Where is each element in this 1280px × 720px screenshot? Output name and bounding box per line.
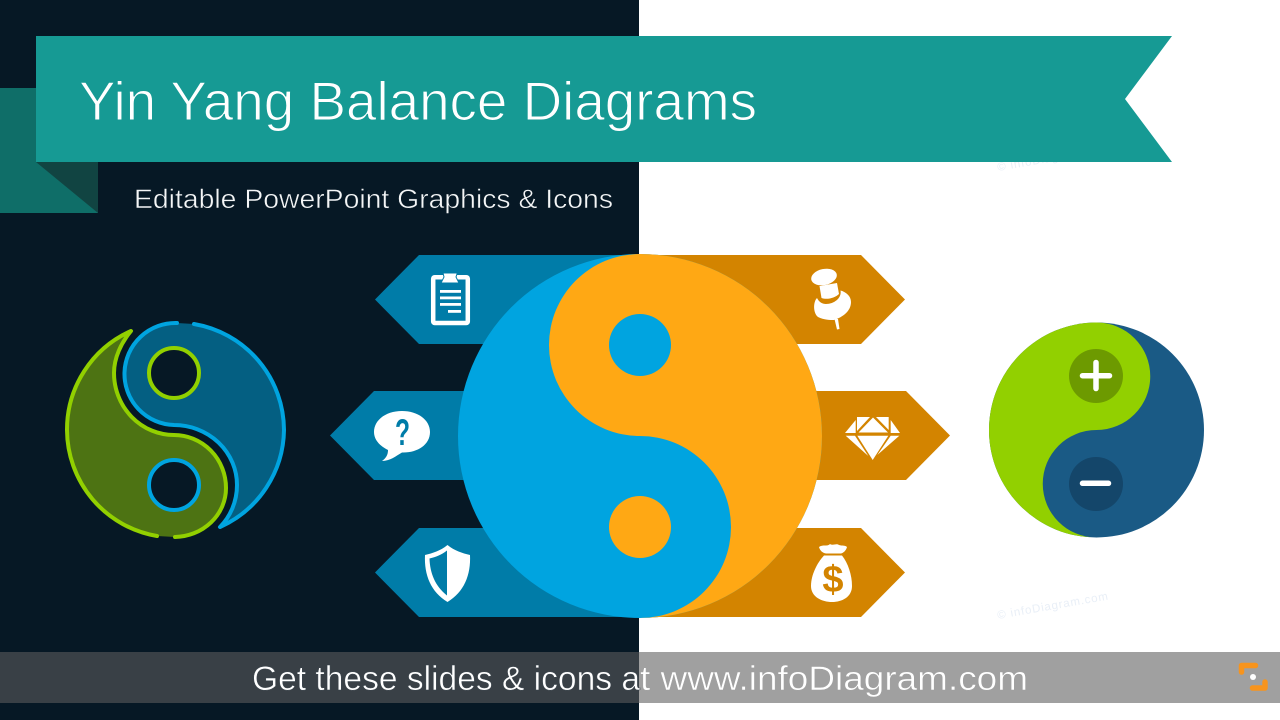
footer text: Get these slides & icons a (252, 660, 640, 698)
right arrow: bottom (640, 528, 905, 617)
footer text: t www.infoDiagram.com (640, 660, 1028, 698)
watermark: top: © infoDiagram.com (996, 143, 1109, 174)
icon: diamond (845, 417, 900, 460)
right arrow: top (640, 255, 905, 344)
dark left background (0, 0, 639, 720)
left arrow: bottom (375, 528, 640, 617)
icon: money bag (811, 544, 852, 602)
left outlined yin yang diagram (67, 323, 284, 537)
green outlined half (67, 331, 226, 537)
icon: push pin (810, 266, 851, 330)
blue disc (989, 322, 1204, 538)
right arrow: middle (640, 391, 950, 480)
blue disc (458, 254, 822, 618)
plus badge (1069, 349, 1123, 403)
green half (989, 322, 1150, 538)
icon: shield (425, 545, 470, 602)
watermark: bottom: © infoDiagram.com (996, 591, 1109, 622)
orange half (549, 254, 822, 618)
ribbon fold (0, 88, 98, 213)
blue dot (609, 314, 671, 376)
orange dot (609, 496, 671, 558)
top hole (149, 348, 199, 398)
icon: money bag: $ (822, 559, 844, 601)
left arrow: middle (330, 391, 640, 480)
icon: clipboard (433, 273, 468, 323)
footer bar (0, 652, 1280, 703)
icon: question bubble: ? (395, 412, 410, 453)
icon: question bubble (374, 411, 430, 461)
subtitle: Editable PowerPoint Graphics & Icons (134, 184, 613, 214)
logo (1242, 666, 1265, 688)
bottom hole (149, 460, 199, 510)
title banner (36, 36, 1172, 162)
right yin yang diagram (989, 322, 1204, 538)
central yin yang diagram (458, 254, 822, 618)
blue outlined half (124, 323, 284, 527)
minus badge (1069, 457, 1123, 511)
left arrow: top (375, 255, 640, 344)
title: Yin Yang Balance Diagrams (79, 70, 757, 132)
